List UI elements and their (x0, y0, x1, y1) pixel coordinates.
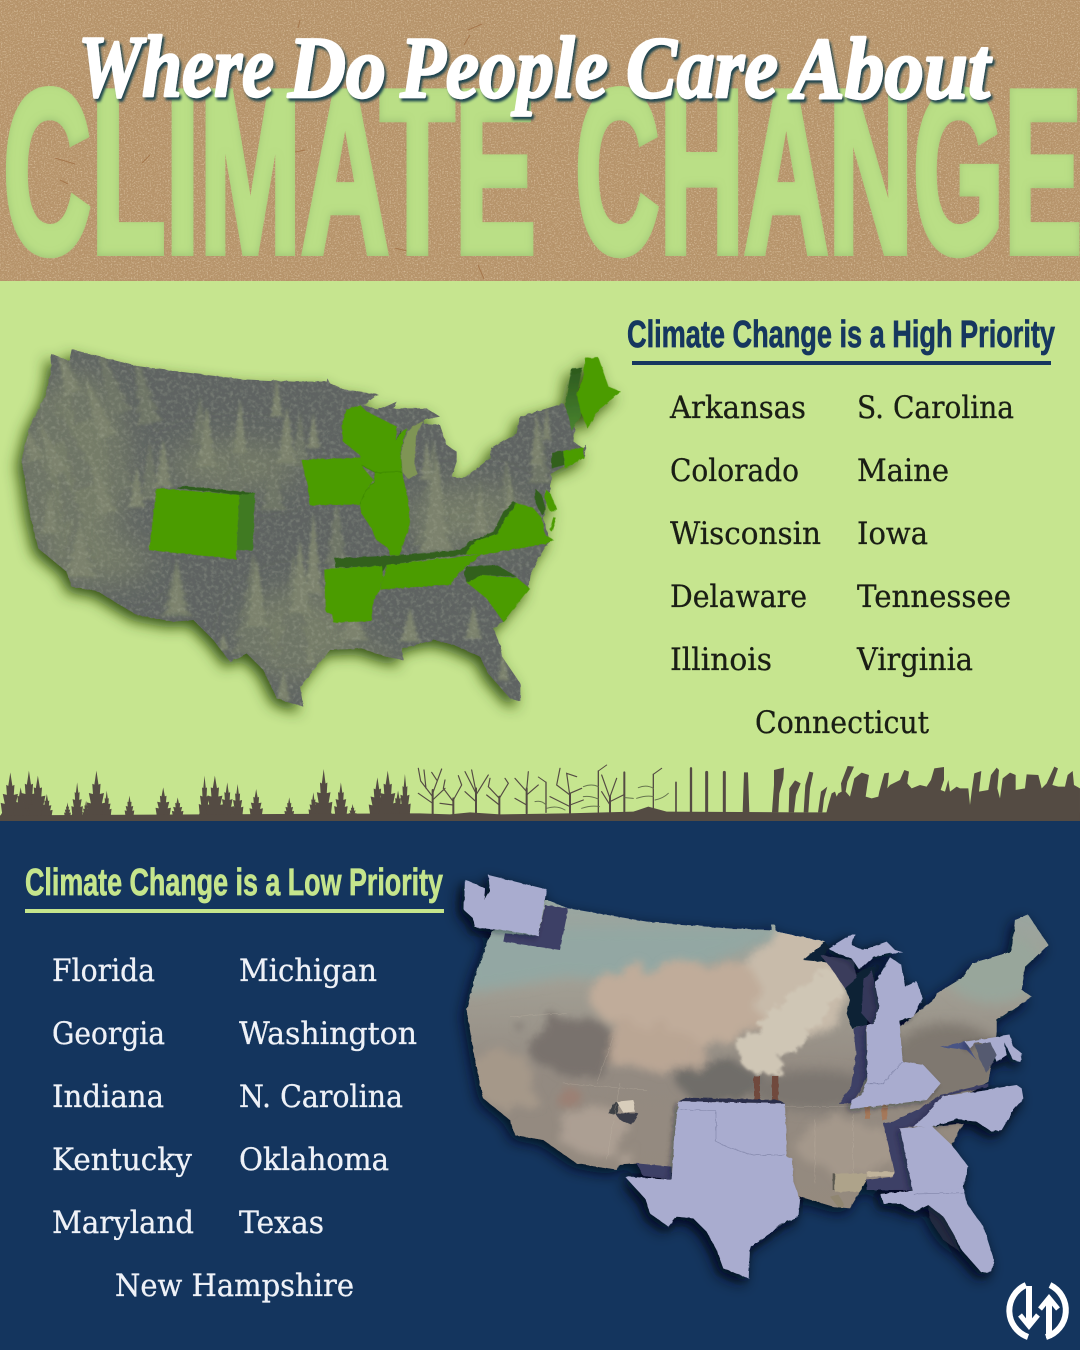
list: high priority states: Arkansas (669, 390, 806, 426)
list: high priority states: Tennessee (857, 579, 1011, 615)
forest map body (0, 333, 633, 713)
panel: low priority background (0, 821, 1080, 1350)
smoke map body (460, 900, 1060, 1220)
list: low priority states: N. Carolina (239, 1079, 403, 1115)
list: low priority states: Indiana (52, 1079, 164, 1115)
lavender priority states (464, 875, 1023, 1278)
list: high priority states: S. Carolina (857, 390, 1014, 426)
list: low priority states: Michigan (239, 953, 377, 989)
ground strip (0, 807, 1080, 821)
list: low priority states: Georgia (52, 1016, 165, 1052)
list: high priority states: Colorado (670, 453, 799, 489)
panel: kraft paper header (0, 0, 1080, 282)
list: high priority states: Illinois (670, 642, 772, 678)
smoke columns and city (743, 766, 1080, 821)
list: low priority states: New Hampshire (115, 1268, 354, 1304)
maryland (965, 1035, 1022, 1062)
green priority states (149, 358, 621, 622)
south carolina (467, 575, 529, 622)
title: where do people care about: About (788, 21, 992, 118)
icon: logo with up and down arrows (1009, 1285, 1066, 1338)
georgia (900, 1126, 968, 1193)
state border lines (678, 1062, 963, 1194)
oklahoma and texas (625, 1102, 800, 1278)
virginia (465, 503, 553, 554)
title: where do people care about: Care (626, 20, 778, 117)
list: high priority states: Iowa (857, 516, 928, 552)
state border lines (360, 465, 402, 504)
gulf buildings patch (830, 1172, 895, 1209)
conifer forest (0, 769, 412, 817)
north carolina (913, 1085, 1023, 1132)
florida (881, 1188, 994, 1273)
faint state lines (510, 1013, 893, 1183)
list: low priority states: Florida (52, 953, 155, 989)
list: high priority states: Delaware (670, 579, 807, 615)
map: high priority states (0, 333, 633, 713)
wisconsin (342, 405, 407, 472)
lower smokestacks (865, 1105, 887, 1120)
list: high priority states: Maine (857, 453, 949, 489)
extruded state shadows (177, 368, 582, 582)
iowa (302, 458, 373, 505)
delaware (545, 490, 557, 511)
title: where do people care about: People (399, 20, 608, 117)
tennessee (380, 554, 482, 589)
bare trees (418, 765, 724, 815)
ship silhouette in the clouds (608, 1100, 638, 1125)
list: low priority states: Kentucky (52, 1142, 192, 1178)
virginia shore (550, 517, 556, 532)
michigan upper peninsula (828, 934, 903, 968)
title: where do people care about (78, 19, 992, 118)
list: high priority states: Connecticut (755, 705, 929, 741)
list: high priority states: Wisconsin (670, 516, 821, 552)
heading: low priority: Climate Change is a Low Priority (25, 862, 443, 904)
skyline: forest fading to smokestacks (0, 765, 1080, 821)
smokestacks (754, 1076, 778, 1100)
list: high priority states: Virginia (856, 642, 973, 678)
list: low priority states: Oklahoma (239, 1142, 389, 1178)
title: where do people care about: Do (287, 20, 386, 117)
list: high priority states (669, 390, 1014, 741)
underline: high priority (632, 361, 1051, 365)
lake superior dark (803, 942, 830, 962)
map: low priority states (460, 875, 1060, 1278)
washington (464, 875, 547, 936)
list: low priority states: Texas (239, 1205, 324, 1241)
panel: high priority background (0, 281, 1080, 821)
illinois (360, 472, 410, 555)
lake michigan dark (845, 967, 875, 1028)
connecticut (563, 448, 584, 468)
list: low priority states: Maryland (52, 1205, 194, 1241)
smoke plume (737, 970, 843, 1077)
maine (577, 358, 621, 428)
arkansas (325, 566, 383, 622)
colorado (149, 488, 239, 559)
list: low priority states: Washington (239, 1016, 417, 1052)
chesapeake detail (975, 1042, 997, 1073)
lake michigan (401, 421, 423, 479)
extruded state shadows (503, 905, 988, 1252)
list: low priority states (52, 953, 417, 1304)
headline: climate change: CLIMATE (3, 43, 536, 302)
title: where do people care about: Where (78, 19, 274, 116)
underline: low priority (25, 909, 444, 913)
michigan indiana kentucky (850, 957, 941, 1109)
